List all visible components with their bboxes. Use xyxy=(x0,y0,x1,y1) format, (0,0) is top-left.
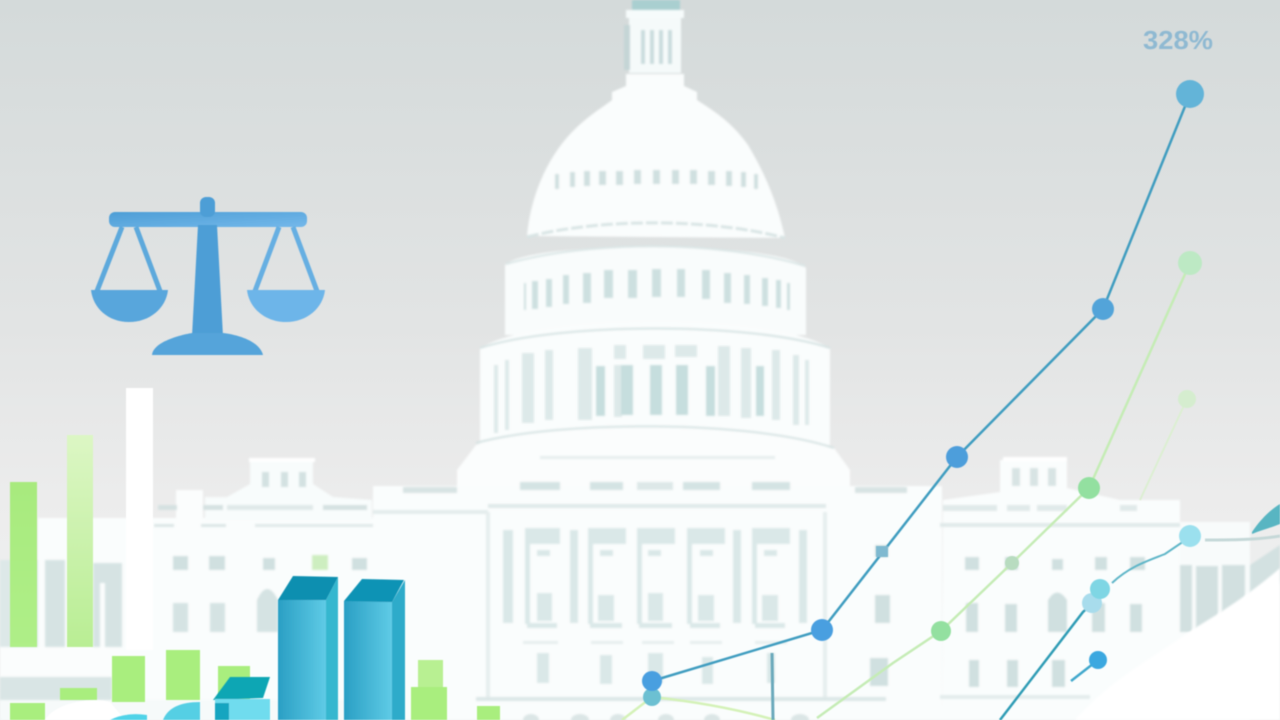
line chart: blue series xyxy=(642,80,1204,720)
3D blue bars xyxy=(110,576,405,720)
teal corner sliver xyxy=(1252,504,1280,534)
vertical stem xyxy=(772,653,773,720)
left wing xyxy=(0,458,480,720)
tall bar 1 xyxy=(278,576,338,720)
tall bar 2 xyxy=(344,579,405,720)
line chart: faint green series xyxy=(622,390,1196,720)
dome xyxy=(457,0,850,490)
line chart: teal series xyxy=(1000,525,1280,720)
bottom-right white swoosh xyxy=(1075,568,1280,720)
value label: 328% xyxy=(1143,25,1213,55)
central block xyxy=(373,482,942,720)
icon: balance scale xyxy=(91,197,325,355)
right wing xyxy=(870,457,1280,720)
left bar chart xyxy=(10,388,500,720)
line chart: green series xyxy=(817,251,1202,718)
small cyan bars xyxy=(110,677,270,720)
